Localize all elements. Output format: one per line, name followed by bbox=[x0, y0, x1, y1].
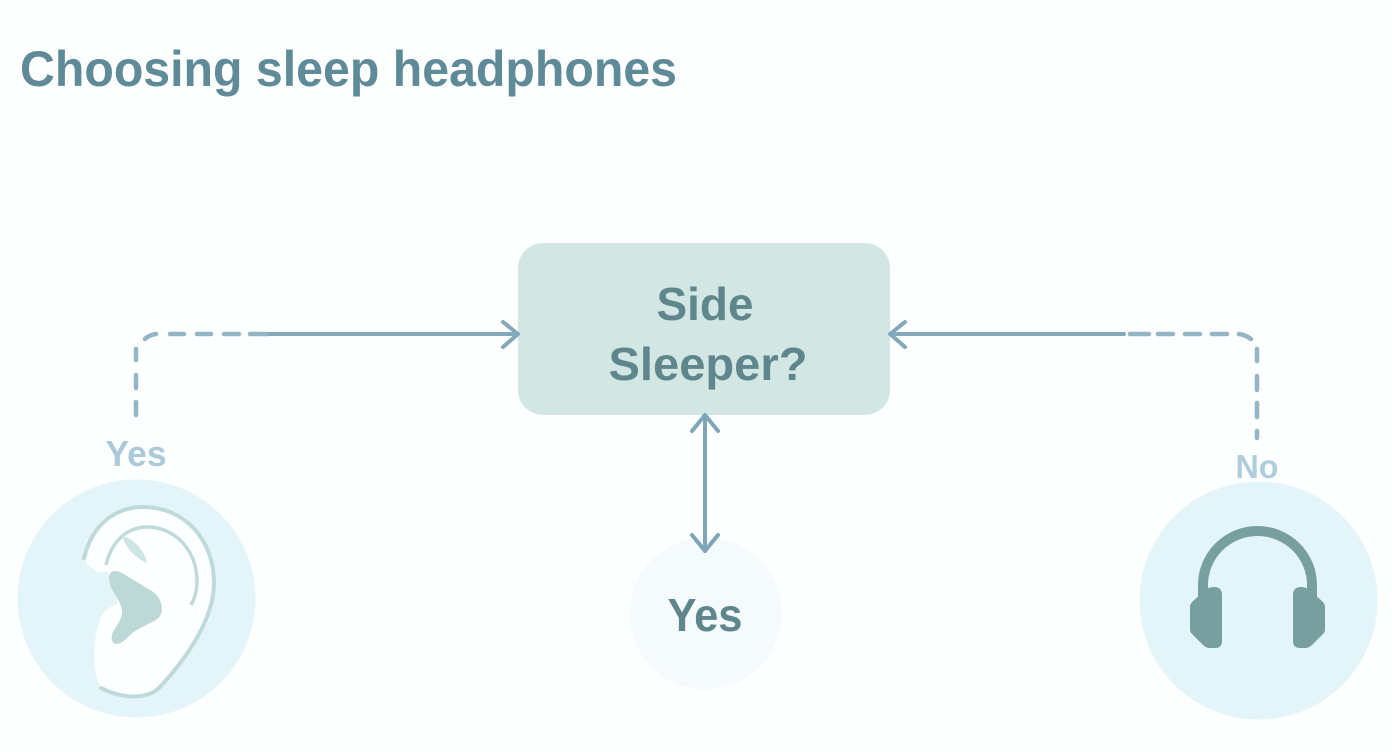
icon: ear bbox=[84, 507, 214, 697]
circle: headphones icon bbox=[1140, 482, 1378, 720]
decision box: side sleeper: Sleeper? bbox=[608, 338, 808, 390]
label: no right: No bbox=[1236, 448, 1278, 485]
title: Choosing sleep headphones bbox=[20, 41, 677, 97]
arrow: left yes path to box bbox=[136, 322, 518, 415]
circle: yes answer: Yes bbox=[668, 589, 742, 641]
arrow: right no path to box bbox=[890, 322, 1257, 438]
circle: ear icon bbox=[18, 480, 256, 718]
decision box: side sleeper: Side bbox=[656, 278, 754, 330]
label: yes left: Yes bbox=[106, 433, 166, 474]
circle: yes answer bbox=[630, 538, 782, 690]
decision box: side sleeper bbox=[518, 243, 890, 415]
icon: headphones bbox=[1190, 531, 1325, 648]
arrow: double-headed box to yes bbox=[692, 415, 718, 551]
